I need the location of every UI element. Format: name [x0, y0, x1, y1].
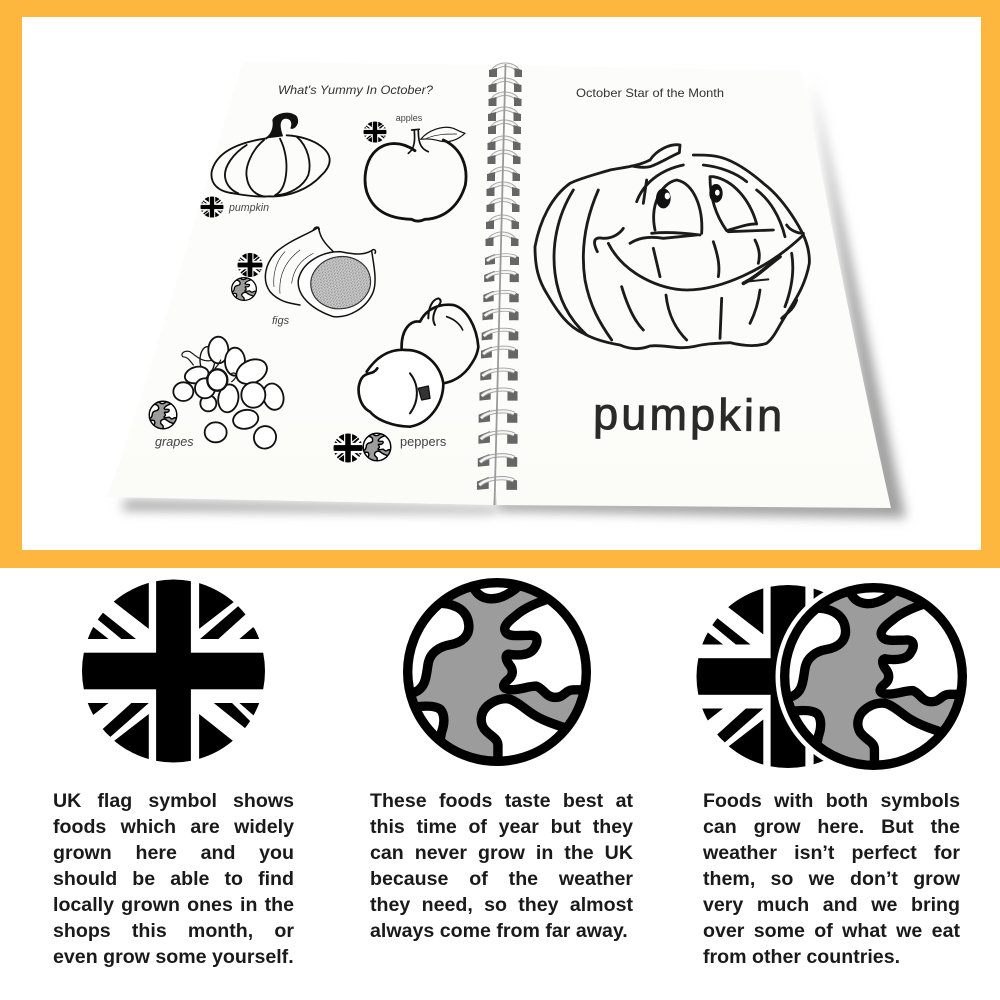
text block: globe explanation: always come from far away.	[370, 920, 628, 942]
text block: both symbols explanation: them, so we don’t grow	[703, 868, 960, 890]
text block: globe explanation: this time of year but they	[370, 816, 633, 838]
big smiling pumpkin drawing	[535, 145, 809, 349]
icon: small flag pumpkin	[200, 196, 224, 218]
icon: small globe peppers	[361, 431, 393, 463]
icon: small flag peppers	[334, 434, 362, 462]
food: peppers	[359, 298, 478, 427]
left page food drawings	[173, 113, 478, 453]
text block: both symbols explanation	[703, 790, 960, 968]
photo panel background	[22, 17, 981, 550]
text block: both symbols explanation: very much and we bring	[703, 894, 960, 916]
text block: both symbols explanation: can grow here. But the	[703, 816, 960, 838]
icon: small flag figs	[238, 253, 262, 277]
small label: grapes: grapes	[155, 435, 194, 449]
food: pumpkin outline	[211, 113, 330, 197]
small label: apples: apples	[396, 113, 423, 123]
text block: UK flag explanation: even grow some yourself.	[53, 946, 294, 968]
icon: small globe figs	[230, 276, 258, 302]
text block: both symbols explanation: Foods with both symbols	[703, 790, 960, 812]
spine	[494, 64, 506, 505]
big word pumpkin: pumpkin	[593, 388, 782, 441]
icon: globe symbol	[394, 569, 600, 775]
text block: both symbols explanation: from other countries.	[703, 946, 900, 968]
food: apple	[365, 127, 466, 221]
right page	[497, 65, 891, 508]
small label: peppers: peppers	[400, 434, 446, 449]
text block: UK flag explanation: foods which are widely	[53, 816, 294, 838]
icon: small flag apples	[364, 122, 386, 142]
text block: globe explanation: can never grow in the UK	[370, 842, 633, 864]
food: pumpkin stem	[265, 113, 298, 138]
small label: pumpkin: pumpkin	[228, 202, 269, 214]
text block: globe explanation: they need, so they almost	[370, 894, 633, 916]
text block: both symbols explanation: over some of what we eat	[703, 920, 960, 942]
orange frame	[0, 0, 1000, 568]
text block: both symbols explanation: weather isn’t perfect for	[703, 842, 960, 864]
text block: UK flag explanation	[53, 790, 294, 968]
icon: UK flag symbol	[82, 580, 265, 762]
food: grapes	[173, 337, 286, 453]
food: figs	[265, 227, 375, 317]
right page heading: October Star of the Month	[576, 87, 724, 100]
small label: figs: figs	[272, 315, 290, 327]
left page	[107, 62, 493, 505]
left page heading: What's Yummy In October?	[278, 83, 433, 97]
text block: UK flag explanation: grown here and you	[53, 842, 294, 864]
text block: UK flag explanation: should be able to find	[53, 868, 294, 890]
text block: globe explanation: because of the weather	[370, 868, 633, 890]
notebook	[107, 62, 906, 518]
text block: globe explanation: These foods taste best at	[370, 790, 633, 812]
text block: UK flag explanation: locally grown ones in the	[53, 894, 294, 916]
icon: small globe grapes	[147, 399, 179, 431]
page shadows	[122, 78, 906, 518]
text block: UK flag explanation: shops this month, or	[53, 920, 294, 942]
icon: both symbols	[696, 574, 976, 779]
text block: UK flag explanation: UK flag symbol shows	[53, 790, 294, 812]
spiral binding	[477, 64, 522, 505]
text block: globe explanation	[370, 790, 633, 942]
